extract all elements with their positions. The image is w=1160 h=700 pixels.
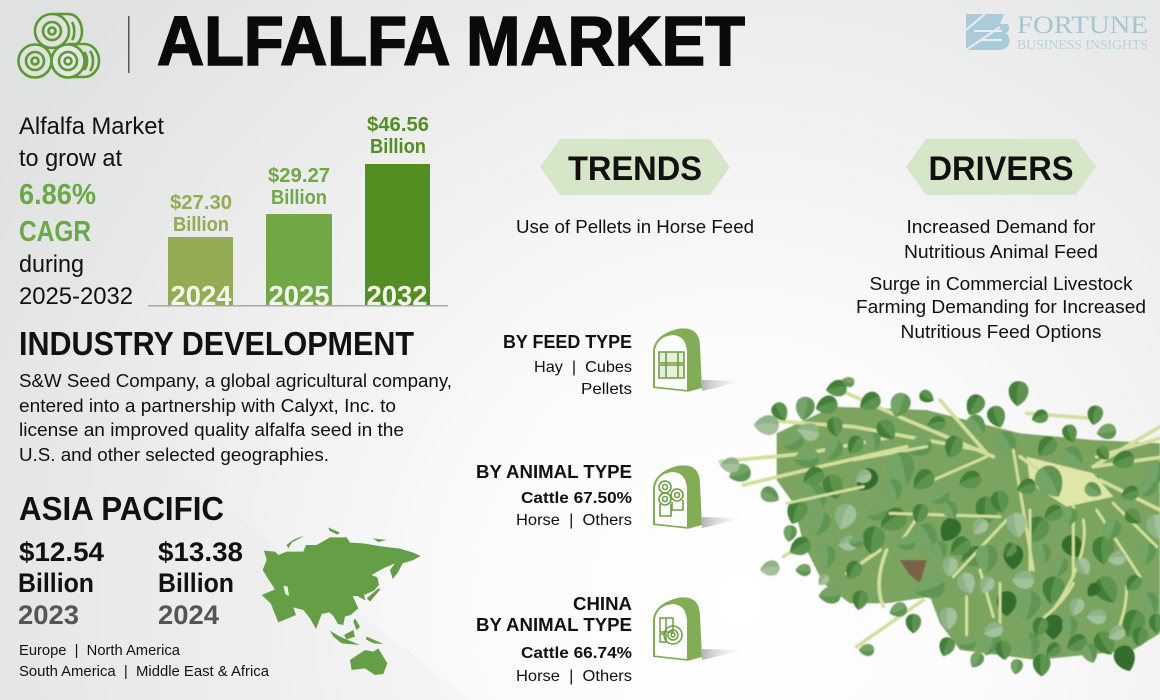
drivers text: Nutritious Animal Feed bbox=[904, 241, 1098, 262]
other regions bbox=[19, 643, 270, 680]
drivers text: Farming Demanding for Increased bbox=[856, 296, 1146, 317]
header divider bbox=[128, 16, 130, 73]
other regions: South America | Middle East & Africa bbox=[19, 664, 270, 680]
bar chart: Billion bbox=[271, 186, 327, 209]
CAGR text block: to grow at bbox=[19, 145, 122, 172]
asia pacific 2024 value: 2024 bbox=[158, 600, 219, 630]
other regions: Europe | North America bbox=[19, 643, 181, 659]
segment: china by animal type: Horse | Others bbox=[516, 668, 632, 685]
asia pacific 2023 value: 2023 bbox=[18, 600, 79, 630]
trends text: Use of Pellets in Horse Feed bbox=[516, 216, 754, 237]
brand logo: Fortune Business Insights bbox=[966, 12, 1148, 53]
asia pacific heading: ASIA PACIFIC bbox=[19, 490, 224, 527]
segment: by animal type: BY ANIMAL TYPE bbox=[476, 462, 632, 482]
asia pacific 2024 value bbox=[158, 537, 243, 630]
brand logo: Fortune Business Insights: FORTUNE bbox=[1017, 12, 1148, 39]
industry development text: U.S. and other selected geographies. bbox=[19, 445, 329, 465]
icon: bale and roll block bbox=[653, 597, 745, 661]
drivers heading: DRIVERS bbox=[928, 150, 1074, 188]
asia pacific 2023 value: Billion bbox=[18, 568, 94, 598]
segment: by feed type: Hay | Cubes bbox=[534, 359, 632, 376]
segment: by animal type bbox=[476, 462, 632, 529]
trends heading bbox=[540, 139, 730, 195]
bar chart: $46.56 bbox=[367, 113, 429, 136]
asia pacific 2023 value bbox=[18, 537, 104, 630]
trends heading: TRENDS bbox=[568, 150, 702, 188]
CAGR text block: CAGR bbox=[19, 216, 91, 248]
icon: rolled bales block bbox=[653, 465, 745, 529]
drivers text: Surge in Commercial Livestock bbox=[870, 273, 1133, 294]
bar chart bbox=[148, 113, 448, 311]
bar chart: Billion bbox=[370, 135, 426, 158]
segment: china by animal type: CHINA bbox=[573, 594, 632, 614]
CAGR text block bbox=[19, 113, 164, 310]
icon: hay bale block bbox=[653, 328, 745, 392]
segment: by feed type bbox=[503, 332, 632, 398]
map: Asia Pacific bbox=[262, 527, 421, 675]
header logo icon: hay bales bbox=[18, 14, 99, 78]
segment: by animal type: Cattle 67.50% bbox=[521, 490, 632, 507]
title: ALFALFA MARKET bbox=[157, 2, 745, 80]
segment: by animal type: Horse | Others bbox=[516, 512, 632, 529]
asia pacific 2024 value: $13.38 bbox=[158, 537, 243, 567]
bar chart: Billion bbox=[173, 213, 229, 236]
segment: by feed type: Pellets bbox=[581, 381, 632, 398]
industry development text: entered into a partnership with Calyxt, Inc. to bbox=[19, 396, 396, 416]
CAGR text block: Alfalfa Market bbox=[19, 113, 164, 140]
bar chart: 2032 bbox=[366, 280, 428, 311]
segment: china by animal type: Cattle 66.74% bbox=[521, 645, 632, 662]
CAGR text block: during bbox=[19, 251, 84, 278]
industry development text: S&W Seed Company, a global agricultural company, bbox=[19, 371, 452, 391]
industry development text: license an improved quality alfalfa seed in the bbox=[19, 420, 404, 440]
bar chart: 2024 bbox=[170, 280, 232, 311]
segment: china by animal type: BY ANIMAL TYPE bbox=[476, 615, 632, 635]
bar chart: $27.30 bbox=[170, 191, 232, 214]
drivers heading bbox=[906, 139, 1096, 195]
asia pacific 2023 value: $12.54 bbox=[19, 537, 104, 567]
bar chart: $29.27 bbox=[268, 164, 330, 187]
drivers text bbox=[856, 216, 1146, 342]
photo: alfalfa sprouts bbox=[720, 375, 1160, 676]
brand logo: Fortune Business Insights: BUSINESS INSIGHTS bbox=[1017, 38, 1148, 53]
industry development text bbox=[19, 371, 452, 465]
drivers text: Increased Demand for bbox=[906, 216, 1096, 237]
asia pacific 2024 value: Billion bbox=[158, 568, 234, 598]
CAGR text block: 6.86% bbox=[19, 179, 96, 211]
drivers text: Nutritious Feed Options bbox=[900, 321, 1102, 342]
segment: china by animal type bbox=[476, 594, 632, 685]
bar chart: 2025 bbox=[268, 280, 330, 311]
industry development heading: INDUSTRY DEVELOPMENT bbox=[19, 325, 414, 362]
segment: by feed type: BY FEED TYPE bbox=[503, 332, 632, 352]
CAGR text block: 2025-2032 bbox=[19, 283, 133, 310]
